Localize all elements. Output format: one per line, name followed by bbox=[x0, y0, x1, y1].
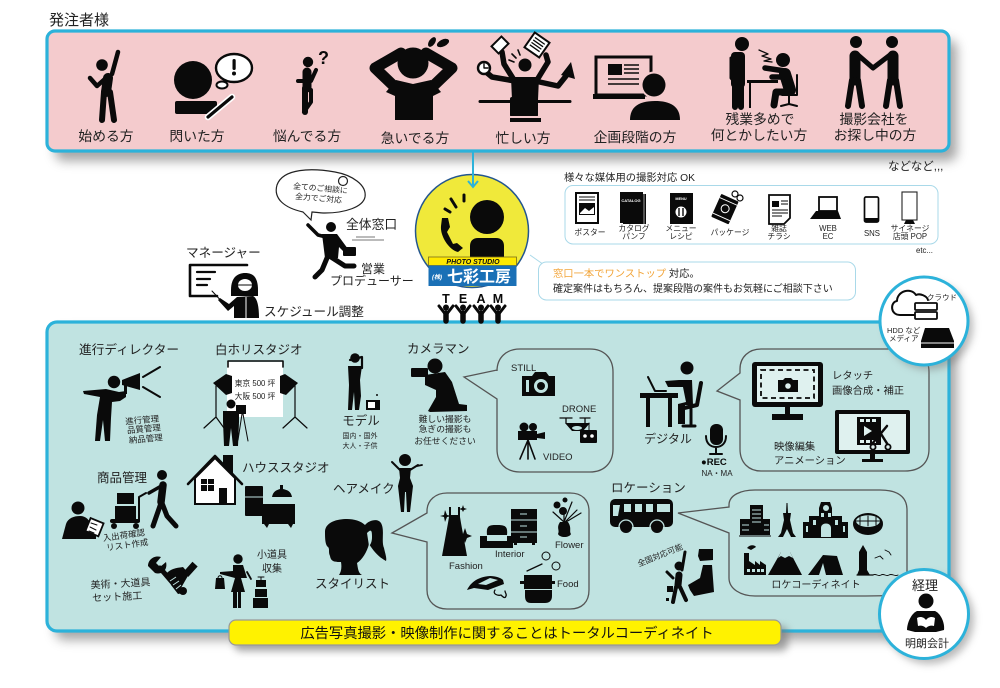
TEAM lettering: M bbox=[493, 292, 503, 306]
icon: person with book bbox=[907, 594, 944, 632]
icon: video camera bbox=[518, 422, 545, 459]
client: 閃いた方: 閃いた方 bbox=[169, 129, 225, 144]
role: ロケーション: 全国対応可能 bbox=[636, 541, 684, 569]
callout: digital retouch and video editing: 画像合成・補正 bbox=[832, 384, 904, 397]
badge: cloud and media: HDD など bbox=[887, 326, 921, 335]
icon: hard drive bbox=[921, 328, 954, 348]
role: ロケーション bbox=[610, 481, 714, 602]
role: 白ホリスタジオ bbox=[204, 342, 307, 446]
client: 残業多めで何とかしたい方: 何とかしたい方 bbox=[711, 128, 807, 143]
role: スタイリスト: スタイリスト bbox=[315, 577, 390, 591]
client: 残業多めで何とかしたい方 bbox=[711, 37, 807, 143]
callout: location coordination: ロケコーディネイト bbox=[771, 578, 861, 591]
media: メニュー レシピ: メニュー bbox=[665, 224, 697, 233]
heading: clients: 発注者様 bbox=[49, 12, 109, 29]
icon: monitor video edit bbox=[835, 410, 910, 462]
role: 商品管理: 商品管理 bbox=[97, 470, 148, 485]
role: 小道具収集: 小道具 bbox=[257, 548, 287, 561]
role: カメラマン bbox=[407, 342, 476, 446]
badge: cloud and media bbox=[880, 277, 973, 370]
callout: fashion, interior, flower, food: Interior bbox=[495, 549, 525, 560]
role: マネージャー: スケジュール調整 bbox=[264, 305, 364, 319]
callout: digital retouch and video editing: 映像編集 bbox=[774, 440, 815, 453]
role: 全体窓口 営業プロデューサー: 営業 bbox=[361, 262, 385, 276]
callout: location coordination bbox=[678, 490, 907, 596]
client: 急いでる方: 急いでる方 bbox=[381, 131, 449, 146]
media: WEB EC: EC bbox=[823, 232, 834, 241]
callout: digital retouch and video editing bbox=[717, 349, 929, 471]
callout: still, drone, video: VIDEO bbox=[543, 452, 573, 463]
client: 残業多めで何とかしたい方: 残業多めで bbox=[726, 112, 794, 127]
role: 白ホリスタジオ: 東京 500 坪 bbox=[235, 378, 276, 388]
client: 始める方: 始める方 bbox=[78, 129, 134, 144]
client: 閃いた方 bbox=[169, 54, 252, 144]
TEAM lettering: E bbox=[459, 292, 467, 306]
media: サイネージ 店頭POP bbox=[891, 192, 930, 241]
icon: stock checker with tablet: リスト作成 bbox=[106, 537, 149, 553]
icon: bus bbox=[610, 499, 673, 534]
callout: still, drone, video: STILL bbox=[511, 363, 536, 374]
banner: total coordination bbox=[229, 620, 788, 651]
speech bubble: 全力でご対応 bbox=[276, 170, 365, 220]
client: 撮影会社をお探し中の方: お探し中の方 bbox=[834, 128, 917, 143]
role: 商品管理 bbox=[97, 470, 176, 529]
icon: tent bbox=[808, 555, 843, 575]
role: モデル bbox=[342, 353, 380, 450]
logo banner bbox=[428, 257, 516, 286]
icon: flower bbox=[553, 498, 581, 537]
media: SNS: SNS bbox=[864, 229, 880, 238]
callout: one-stop service: 確定案件はもちろん、提案段階の案件もお気軽にご相談下さい bbox=[553, 282, 833, 295]
role: 小道具収集: 収集 bbox=[262, 562, 282, 575]
icon: stadium bbox=[853, 513, 883, 535]
panel: media: etc... bbox=[916, 246, 933, 255]
badge: accounting bbox=[880, 570, 974, 664]
media: サイネージ 店頭POP: サイネージ bbox=[891, 224, 930, 233]
panel: media bbox=[564, 171, 938, 255]
media: ポスター: ポスター bbox=[574, 228, 606, 237]
role: 進行ディレクター: 品質管理 bbox=[127, 422, 162, 435]
icon: sofa bbox=[480, 525, 513, 548]
media: SNS bbox=[864, 197, 880, 238]
client: 悩んでる方: 悩んでる方 bbox=[273, 129, 341, 144]
role: 美術・大道具セット施工: セット施工 bbox=[92, 589, 142, 604]
client: 急いでる方 bbox=[375, 36, 452, 146]
icon: drone bbox=[560, 418, 597, 443]
panel: clients bbox=[47, 31, 957, 161]
media: メニュー レシピ: レシピ bbox=[669, 232, 693, 241]
role: モデル: 大人・子供 bbox=[342, 441, 378, 450]
media: WEB EC: WEB bbox=[819, 224, 837, 233]
role: 全体窓口 営業プロデューサー: 全体窓口 bbox=[346, 217, 397, 232]
client: 悩んでる方 bbox=[273, 48, 341, 144]
role: 白ホリスタジオ: 大阪 500 坪 bbox=[235, 391, 276, 401]
icon: microphone NA MA bbox=[701, 424, 733, 478]
icon: cloud bbox=[892, 291, 937, 319]
speech bubble: 全力でご対応: 全てのご相談に bbox=[293, 181, 348, 195]
client: 撮影会社をお探し中の方: 撮影会社を bbox=[840, 111, 908, 127]
icon: drawers bbox=[511, 509, 537, 545]
icon: iron bbox=[467, 576, 506, 598]
media: カタログ パンフ: カタログ bbox=[618, 223, 650, 233]
logo: 七彩工房 TEAM bbox=[416, 174, 528, 321]
client: 忙しい方 bbox=[478, 32, 575, 146]
badge: accounting: 経理 bbox=[912, 578, 938, 593]
role: マネージャー: マネージャー bbox=[186, 246, 261, 260]
client: 企画段階の方 bbox=[593, 57, 680, 145]
role: カメラマン: カメラマン bbox=[407, 342, 470, 356]
role: スタイリスト bbox=[315, 519, 390, 591]
role: カメラマン: 難しい撮影も bbox=[419, 413, 471, 424]
callout: fashion, interior, flower, food: Fashion bbox=[449, 561, 483, 572]
icon: pot bbox=[520, 552, 560, 603]
role: ヘアメイク bbox=[333, 454, 422, 512]
icon: university bbox=[803, 502, 848, 538]
callout: digital retouch and video editing: レタッチ bbox=[832, 370, 873, 382]
role: モデル: モデル bbox=[342, 413, 380, 428]
logo banner: PHOTO STUDIO bbox=[446, 259, 500, 266]
media: パッケージ bbox=[711, 191, 750, 237]
icon: stock checker with tablet bbox=[62, 502, 149, 553]
badge: cloud and media: メディア bbox=[889, 333, 918, 343]
role: 進行ディレクター bbox=[79, 342, 179, 445]
callout: fashion, interior, flower, food bbox=[392, 493, 589, 609]
speech bubble: 全力でご対応: 全力でご対応 bbox=[295, 191, 343, 205]
icon: lighthouse bbox=[857, 545, 898, 576]
logo banner: (株) bbox=[432, 273, 442, 281]
icon: stock checker with tablet: 入出荷確認 bbox=[102, 527, 146, 543]
icon: monitor retouch bbox=[752, 362, 823, 420]
badge: cloud and media: クラウド bbox=[927, 293, 957, 302]
icon: mount Fuji bbox=[768, 552, 802, 575]
role: マネージャー bbox=[186, 246, 364, 319]
client: 撮影会社をお探し中の方 bbox=[834, 36, 917, 143]
client: 忙しい方: 忙しい方 bbox=[495, 131, 551, 146]
callout: fashion, interior, flower, food: Food bbox=[557, 579, 579, 590]
role: ハウススタジオ: ハウススタジオ bbox=[242, 461, 330, 475]
callout: still, drone, video bbox=[464, 349, 613, 472]
icon: dress bbox=[440, 505, 472, 556]
banner: total coordination: 広告写真撮影・映像制作に関することはトータルコーディネイト bbox=[300, 624, 714, 642]
callout: one-stop service bbox=[530, 255, 856, 300]
role: カメラマン: 急ぎの撮影も bbox=[419, 423, 471, 434]
media: 雑誌 チラシ: 雑誌 bbox=[771, 223, 787, 233]
media: パッケージ: パッケージ bbox=[711, 228, 750, 237]
icon: microphone NA MA: ●REC bbox=[701, 457, 727, 468]
client: 悩んでる方: ? bbox=[318, 48, 329, 68]
icon: factory bbox=[744, 545, 766, 575]
TEAM lettering: T bbox=[442, 292, 450, 306]
panel: team bbox=[47, 322, 957, 640]
role: 全体窓口 営業プロデューサー bbox=[276, 170, 414, 288]
TEAM lettering bbox=[442, 292, 503, 306]
role: 全体窓口 営業プロデューサー: プロデューサー bbox=[330, 273, 414, 288]
media: 雑誌 チラシ: チラシ bbox=[767, 232, 791, 241]
callout: fashion, interior, flower, food: Flower bbox=[555, 540, 584, 551]
role: 小道具収集 bbox=[215, 548, 287, 608]
role: ヘアメイク: ヘアメイク bbox=[333, 482, 395, 496]
arrow: clients to team bbox=[468, 152, 478, 187]
role: ハウススタジオ bbox=[188, 455, 330, 528]
icon: tower bbox=[778, 503, 796, 537]
role: 美術・大道具セット施工 bbox=[90, 556, 198, 605]
panel: media: 様々な媒体用の撮影対応 OK bbox=[564, 171, 695, 184]
role: 進行ディレクター: 進行管理 bbox=[125, 414, 160, 427]
media: メニュー レシピ: MENU bbox=[675, 197, 687, 201]
media: メニュー レシピ bbox=[665, 193, 697, 241]
icon: office building bbox=[739, 505, 771, 536]
media: カタログ パンフ bbox=[618, 192, 650, 241]
icon: person with Japan map bbox=[666, 549, 714, 602]
media: サイネージ 店頭POP: 店頭 POP bbox=[893, 232, 927, 241]
icon: microphone NA MA: NA・MA bbox=[701, 469, 733, 478]
note: などなど: などなど,,, bbox=[888, 160, 943, 173]
media: ポスター bbox=[574, 193, 606, 237]
role: デジタル: デジタル bbox=[644, 431, 692, 446]
role: 進行ディレクター: 進行ディレクター bbox=[79, 342, 179, 357]
media: カタログ パンフ: CATALOG bbox=[621, 198, 641, 203]
media: WEB EC bbox=[810, 197, 841, 241]
role: ロケーション: ロケーション bbox=[611, 481, 686, 495]
badge: accounting: 明朗会計 bbox=[905, 636, 949, 650]
role: カメラマン: お任せください bbox=[414, 435, 476, 446]
role: デジタル bbox=[640, 362, 701, 446]
role: 美術・大道具セット施工: 美術・大道具 bbox=[90, 575, 151, 592]
role: 白ホリスタジオ: 白ホリスタジオ bbox=[215, 342, 303, 357]
media: カタログ パンフ: パンフ bbox=[622, 232, 646, 241]
client: 企画段階の方: 企画段階の方 bbox=[594, 130, 677, 145]
media: 雑誌 チラシ bbox=[767, 195, 791, 241]
icon: still camera bbox=[522, 372, 555, 396]
icon: person on phone bbox=[441, 195, 504, 258]
callout: digital retouch and video editing: アニメーション bbox=[774, 456, 846, 467]
callout: one-stop service: 窓口一本でワンストップ 対応。 bbox=[553, 267, 700, 280]
role: モデル: 国内・国外 bbox=[342, 431, 378, 440]
callout: still, drone, video: DRONE bbox=[562, 404, 596, 415]
TEAM lettering: A bbox=[476, 292, 486, 306]
role: 進行ディレクター: 納品管理 bbox=[128, 432, 164, 445]
client: 始める方 bbox=[78, 52, 134, 144]
icon: four team members bbox=[439, 304, 505, 321]
logo banner: 七彩工房 bbox=[447, 268, 511, 286]
